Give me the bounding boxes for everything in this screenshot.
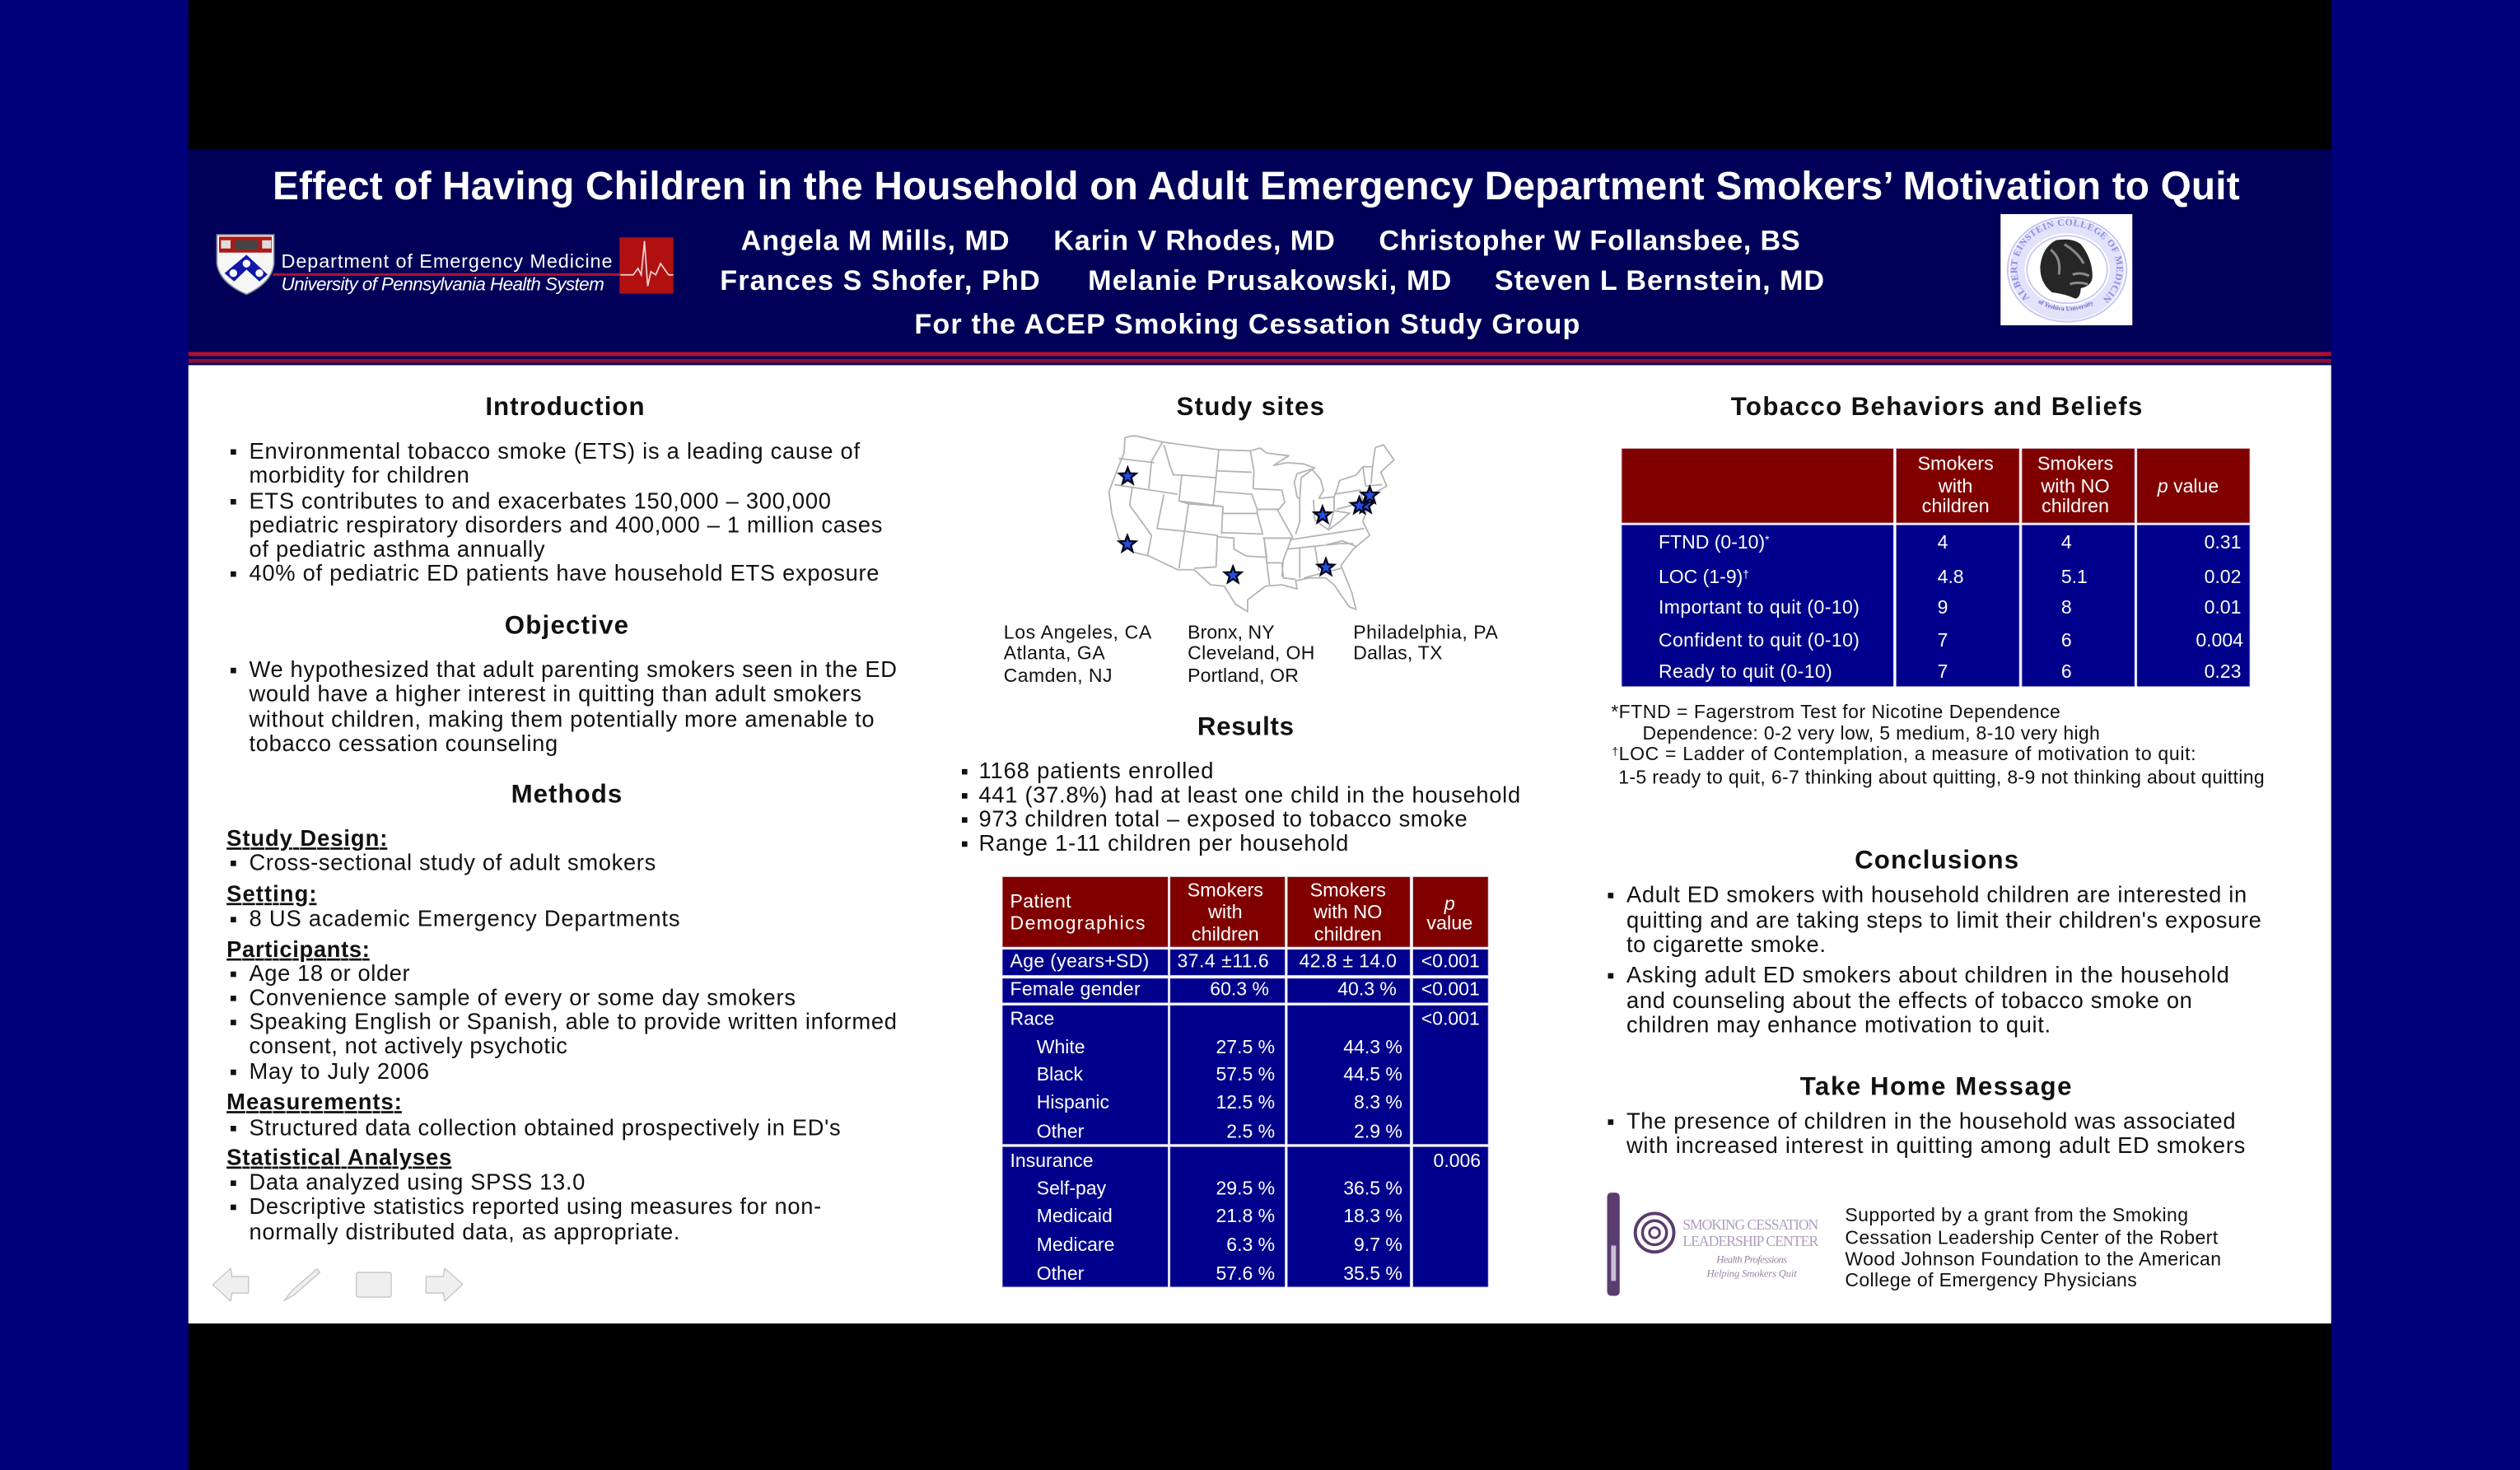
table: tobacco behaviors: children (1922, 495, 1990, 516)
text block: methods: Setting: (226, 880, 316, 906)
table: tobacco behaviors: 5.1 (2061, 566, 2088, 587)
table: patient demographics: Medicaid (1037, 1205, 1113, 1226)
icon: Penn shield (217, 235, 274, 294)
table: patient demographics: 18.3 % (1343, 1205, 1402, 1226)
table: patient demographics: 29.5 % (1216, 1178, 1275, 1199)
text block: conclusions bullets: to cigarette smoke. (1626, 931, 1826, 957)
logo: Penn Emergency Medicine: Department of Emergency Medicine (282, 250, 613, 272)
icons: slide navigation controls (212, 1268, 463, 1301)
table: patient demographics: 35.5 % (1343, 1262, 1402, 1284)
table: patient demographics: 12.5 % (1216, 1091, 1275, 1113)
logo: Smoking Cessation Leadership Center: Health Professions (1715, 1253, 1787, 1265)
authors: Frances S Shofer, PhD (720, 265, 1040, 296)
panel: left column (212, 392, 897, 1301)
table: patient demographics: White (1037, 1036, 1085, 1057)
text block: conclusions bullets: and counseling about the effects of tobacco smoke on (1626, 987, 2192, 1013)
icon: star Philadelphia (1357, 497, 1374, 512)
table: patient demographics: 44.5 % (1343, 1063, 1402, 1085)
text block: methods: Descriptive statistics reported using measures for non- (249, 1193, 821, 1219)
table: patient demographics: Self-pay (1037, 1178, 1107, 1199)
table: tobacco behaviors: 0.31 (2205, 531, 2241, 553)
table: patient demographics: value (1426, 912, 1472, 934)
heading: Methods: Methods (511, 779, 622, 808)
heading: Results: Results (1197, 712, 1294, 740)
text block: introduction bullets: Environmental tobacco smoke (ETS) is a leading cause of (249, 438, 860, 464)
text block: results bullets: 973 children total – exposed to tobacco smoke (978, 806, 1468, 832)
table: tobacco behaviors: with NO (2040, 475, 2110, 497)
logo: Penn Emergency Medicine: University of Pennsylvania Health System (282, 274, 604, 295)
text block: results bullets: 1168 patients enrolled (978, 758, 1213, 783)
table: patient demographics: 8.3 % (1354, 1091, 1402, 1113)
text block: methods: Study Design: (226, 825, 387, 851)
text block: introduction bullets: of pediatric asthma annually (249, 536, 545, 562)
table: tobacco behaviors: LOC (1-9) (1659, 566, 1743, 587)
table: patient demographics: 0.006 (1434, 1150, 1481, 1171)
table: tobacco behaviors: Ready to quit (0-10) (1659, 660, 1832, 682)
table: patient demographics: Other (1037, 1262, 1085, 1284)
text block: take home bullet: The presence of children in the household was associated (1626, 1108, 2236, 1134)
text block: conclusions bullets (1608, 881, 2261, 1037)
table: patient demographics: 27.5 % (1216, 1036, 1275, 1057)
text block: site cities: Atlanta, GA (1004, 642, 1105, 664)
table: patient demographics: children (1192, 923, 1259, 945)
text block: site cities: Portland, OR (1188, 665, 1299, 686)
table: patient demographics: 9.7 % (1354, 1234, 1402, 1255)
table: patient demographics: <0.001 (1421, 1008, 1480, 1029)
text block: site cities (1004, 621, 1498, 686)
text block: site cities: Los Angeles, CA (1004, 621, 1152, 642)
logo: Smoking Cessation Leadership Center (1608, 1192, 1818, 1296)
table: tobacco behaviors: 7 (1938, 629, 1948, 651)
text block: conclusions bullets: Adult ED smokers with household children are interested in (1626, 881, 2247, 907)
text block: objective: without children, making them potentially more amenable to (248, 707, 875, 732)
table: tobacco behaviors: † (1743, 568, 1749, 581)
table: patient demographics: Insurance (1010, 1150, 1094, 1171)
table: patient demographics: Medicare (1037, 1234, 1114, 1255)
text block: table footnotes: † (1612, 745, 1618, 758)
heading: Introduction: Introduction (485, 392, 645, 421)
icon: star Bronx (1361, 487, 1378, 502)
table: patient demographics: Female gender (1010, 978, 1141, 1000)
text block: results bullets (962, 758, 1520, 856)
table: patient demographics: Other (1037, 1120, 1085, 1141)
table: patient demographics: Smokers (1188, 880, 1263, 901)
table: tobacco behaviors: 6 (2061, 629, 2072, 651)
logo: Albert Einstein College of Medicine seal: of Yeshiva University (2038, 301, 2093, 311)
text block: take home bullet: with increased interest in quitting among adult ED smokers (1626, 1132, 2245, 1158)
table: patient demographics: 60.3 % (1210, 978, 1269, 1000)
text block: table footnotes: 1-5 ready to quit, 6-7 thinking about quitting, 8-9 not thinking about quitting (1618, 767, 2265, 788)
panel: right column (1608, 392, 2265, 1296)
logo: Smoking Cessation Leadership Center: Helping Smokers Quit (1706, 1268, 1797, 1280)
panel: header banner (188, 150, 2331, 366)
authors: Angela M Mills, MD (741, 225, 1010, 256)
table: patient demographics: 2.5 % (1226, 1120, 1275, 1141)
text block: methods: Structured data collection obtained prospectively in ED's (249, 1114, 841, 1140)
text block: methods: Speaking English or Spanish, able to provide written informed (249, 1009, 897, 1034)
text block: objective: We hypothesized that adult parenting smokers seen in the ED (249, 656, 897, 682)
icon: star Atlanta (1318, 559, 1334, 575)
text block: site cities: Philadelphia, PA (1353, 621, 1498, 642)
table: tobacco behaviors: 8 (2061, 596, 2072, 618)
table: tobacco behaviors: FTND (0-10) (1659, 531, 1765, 553)
text block: objective: tobacco cessation counseling (249, 730, 558, 756)
text block: grant acknowledgement: Wood Johnson Foundation to the American (1845, 1248, 2221, 1269)
logo: Smoking Cessation Leadership Center: LEADERSHIP CENTER (1682, 1233, 1818, 1249)
table: patient demographics: Hispanic (1037, 1091, 1109, 1113)
text block: grant acknowledgement: College of Emergency Physicians (1845, 1269, 2137, 1290)
table: patient demographics: with NO (1313, 901, 1382, 922)
text block: introduction bullets: 40% of pediatric ED patients have household ETS exposure (249, 560, 879, 586)
table: patient demographics: 42.8 ± 14.0 (1300, 950, 1397, 971)
text block: introduction bullets: morbidity for children (249, 462, 469, 488)
text block: table footnotes: *FTND = Fagerstrom Test for Nicotine Dependence (1611, 701, 2060, 722)
text block: conclusions bullets: quitting and are taking steps to limit their children's exposure (1626, 908, 2261, 933)
table: tobacco behaviors: Smokers (2037, 452, 2113, 474)
text block: methods: Age 18 or older (249, 960, 410, 986)
table: tobacco behaviors: 4 (2061, 531, 2072, 553)
text block: methods: normally distributed data, as appropriate. (249, 1219, 679, 1244)
text block: methods: Data analyzed using SPSS 13.0 (249, 1169, 585, 1195)
text block: methods: Convenience sample of every or some day smokers (249, 984, 796, 1010)
authors: Melanie Prusakowski, MD (1088, 265, 1451, 296)
table: patient demographics: 40.3 % (1337, 978, 1397, 1000)
map: US study sites (1109, 436, 1394, 612)
authors: Christopher W Follansbee, BS (1379, 225, 1800, 256)
table: patient demographics: Black (1037, 1063, 1084, 1085)
table: patient demographics: p (1444, 893, 1455, 914)
text block: grant acknowledgement: Cessation Leadership Center of the Robert (1845, 1227, 2219, 1248)
table: tobacco behaviors: 0.004 (2196, 629, 2243, 651)
panel: middle column (962, 392, 1520, 1287)
icon: Einstein head (2040, 240, 2093, 299)
text block: objective (231, 656, 897, 756)
table: patient demographics: Patient (1010, 890, 1071, 912)
text block: take home bullet (1608, 1108, 2245, 1158)
table: patient demographics: Race (1010, 1008, 1054, 1029)
table: tobacco behaviors: 0.01 (2205, 596, 2241, 618)
text block: table footnotes: LOC = Ladder of Contemplation, a measure of motivation to quit: (1619, 743, 2196, 764)
text block: conclusions bullets: Asking adult ED smokers about children in the household (1626, 962, 2229, 987)
text block: results bullets: 441 (37.8%) had at least one child in the household (978, 782, 1520, 807)
table: tobacco behaviors: 0.02 (2205, 566, 2241, 587)
heading: Study sites: Study sites (1177, 392, 1324, 421)
table: patient demographics: with (1207, 901, 1243, 922)
icon: star Camden (1351, 497, 1368, 513)
text block: methods: consent, not actively psychotic (249, 1033, 567, 1058)
text block: table footnotes (1611, 701, 2265, 788)
text block: grant acknowledgement: Supported by a grant from the Smoking (1845, 1204, 2188, 1225)
table: patient demographics: children (1314, 923, 1382, 945)
table: tobacco behaviors: with (1938, 475, 1972, 497)
text block: site cities: Bronx, NY (1188, 621, 1275, 642)
table: tobacco behaviors (1622, 448, 2250, 687)
table: tobacco behaviors: Important to quit (0-10) (1659, 596, 1860, 618)
table: patient demographics: 44.3 % (1343, 1036, 1402, 1057)
logo: Smoking Cessation Leadership Center: SMOKING CESSATION (1682, 1216, 1818, 1233)
table: patient demographics: 21.8 % (1216, 1205, 1275, 1226)
authors: Karin V Rhodes, MD (1053, 225, 1335, 256)
text block: introduction bullets (231, 438, 882, 586)
text block: methods: 8 US academic Emergency Departments (249, 906, 679, 931)
text block: methods: Participants: (226, 936, 370, 962)
table: tobacco behaviors: Smokers (1917, 452, 1994, 474)
table: tobacco behaviors: p value (2157, 475, 2219, 497)
text block: results bullets: Range 1-11 children per household (978, 830, 1348, 856)
table: tobacco behaviors: 4.8 (1938, 566, 1964, 587)
table: tobacco behaviors: children (2042, 495, 2109, 516)
table: patient demographics: 57.6 % (1216, 1262, 1275, 1284)
table: patient demographics: 37.4 ±11.6 (1177, 950, 1269, 971)
table: patient demographics: <0.001 (1421, 950, 1480, 971)
heading: Objective: Objective (505, 611, 628, 640)
text block: introduction bullets: pediatric respiratory disorders and 400,000 – 1 million cases (249, 512, 882, 538)
text block: methods (226, 825, 897, 1244)
table: patient demographics: 57.5 % (1216, 1063, 1275, 1085)
table: patient demographics: 36.5 % (1343, 1178, 1402, 1199)
text block: introduction bullets: ETS contributes to and exacerbates 150,000 – 300,000 (249, 488, 831, 513)
text block: site cities: Camden, NJ (1004, 665, 1112, 686)
table: patient demographics: <0.001 (1421, 978, 1480, 1000)
text block: table footnotes: Dependence: 0-2 very low, 5 medium, 8-10 very high (1642, 722, 2100, 744)
text block: site cities: Cleveland, OH (1188, 642, 1314, 664)
table: tobacco behaviors: 6 (2061, 660, 2072, 682)
table: patient demographics: 6.3 % (1226, 1234, 1275, 1255)
icon: star Portland (1119, 468, 1136, 483)
authors: For the ACEP Smoking Cessation Study Group (914, 309, 1580, 340)
heading: Take Home Message: Take Home Message (1800, 1072, 2072, 1101)
table: tobacco behaviors: 0.23 (2205, 660, 2241, 682)
table: tobacco behaviors: 9 (1938, 596, 1948, 618)
icon: star Los Angeles (1119, 535, 1136, 551)
text block: grant acknowledgement (1845, 1204, 2221, 1290)
table: tobacco behaviors: 7 (1938, 660, 1948, 682)
table: tobacco behaviors: 4 (1938, 531, 1948, 553)
table: patient demographics: Demographics (1010, 912, 1145, 934)
text block: methods: May to July 2006 (249, 1058, 429, 1084)
table: tobacco behaviors: Confident to quit (0-10) (1659, 629, 1860, 651)
authors: Steven L Bernstein, MD (1495, 265, 1824, 296)
table: patient demographics (1002, 877, 1488, 1287)
table: patient demographics: Smokers (1310, 880, 1386, 901)
text block: objective: would have a higher interest in quitting than adult smokers (248, 680, 861, 706)
panel: poster body (189, 365, 2331, 1323)
title: Effect of Having Children in the Household on Adult Emergency Department Smokers’ Motivation to Quit (273, 165, 2240, 208)
text block: methods: Statistical Analyses (226, 1144, 451, 1169)
icon: star Dallas (1225, 567, 1241, 582)
table: tobacco behaviors: * (1765, 534, 1770, 546)
table: patient demographics: Age (years+SD) (1010, 950, 1149, 971)
icon: star Cleveland (1314, 506, 1331, 522)
heading: Conclusions: Conclusions (1855, 845, 2018, 874)
table: patient demographics: 2.9 % (1354, 1120, 1402, 1141)
authors (720, 225, 1824, 340)
text block: conclusions bullets: children may enhance motivation to quit. (1626, 1011, 2051, 1037)
text block: methods: Cross-sectional study of adult smokers (249, 849, 656, 875)
text block: methods: Measurements: (226, 1089, 402, 1114)
text block: site cities: Dallas, TX (1353, 642, 1442, 664)
logo: Albert Einstein College of Medicine seal (2000, 214, 2133, 325)
logo: Penn Emergency Medicine (217, 235, 674, 295)
heading: Tobacco Behaviors and Beliefs: Tobacco Behaviors and Beliefs (1731, 392, 2142, 421)
